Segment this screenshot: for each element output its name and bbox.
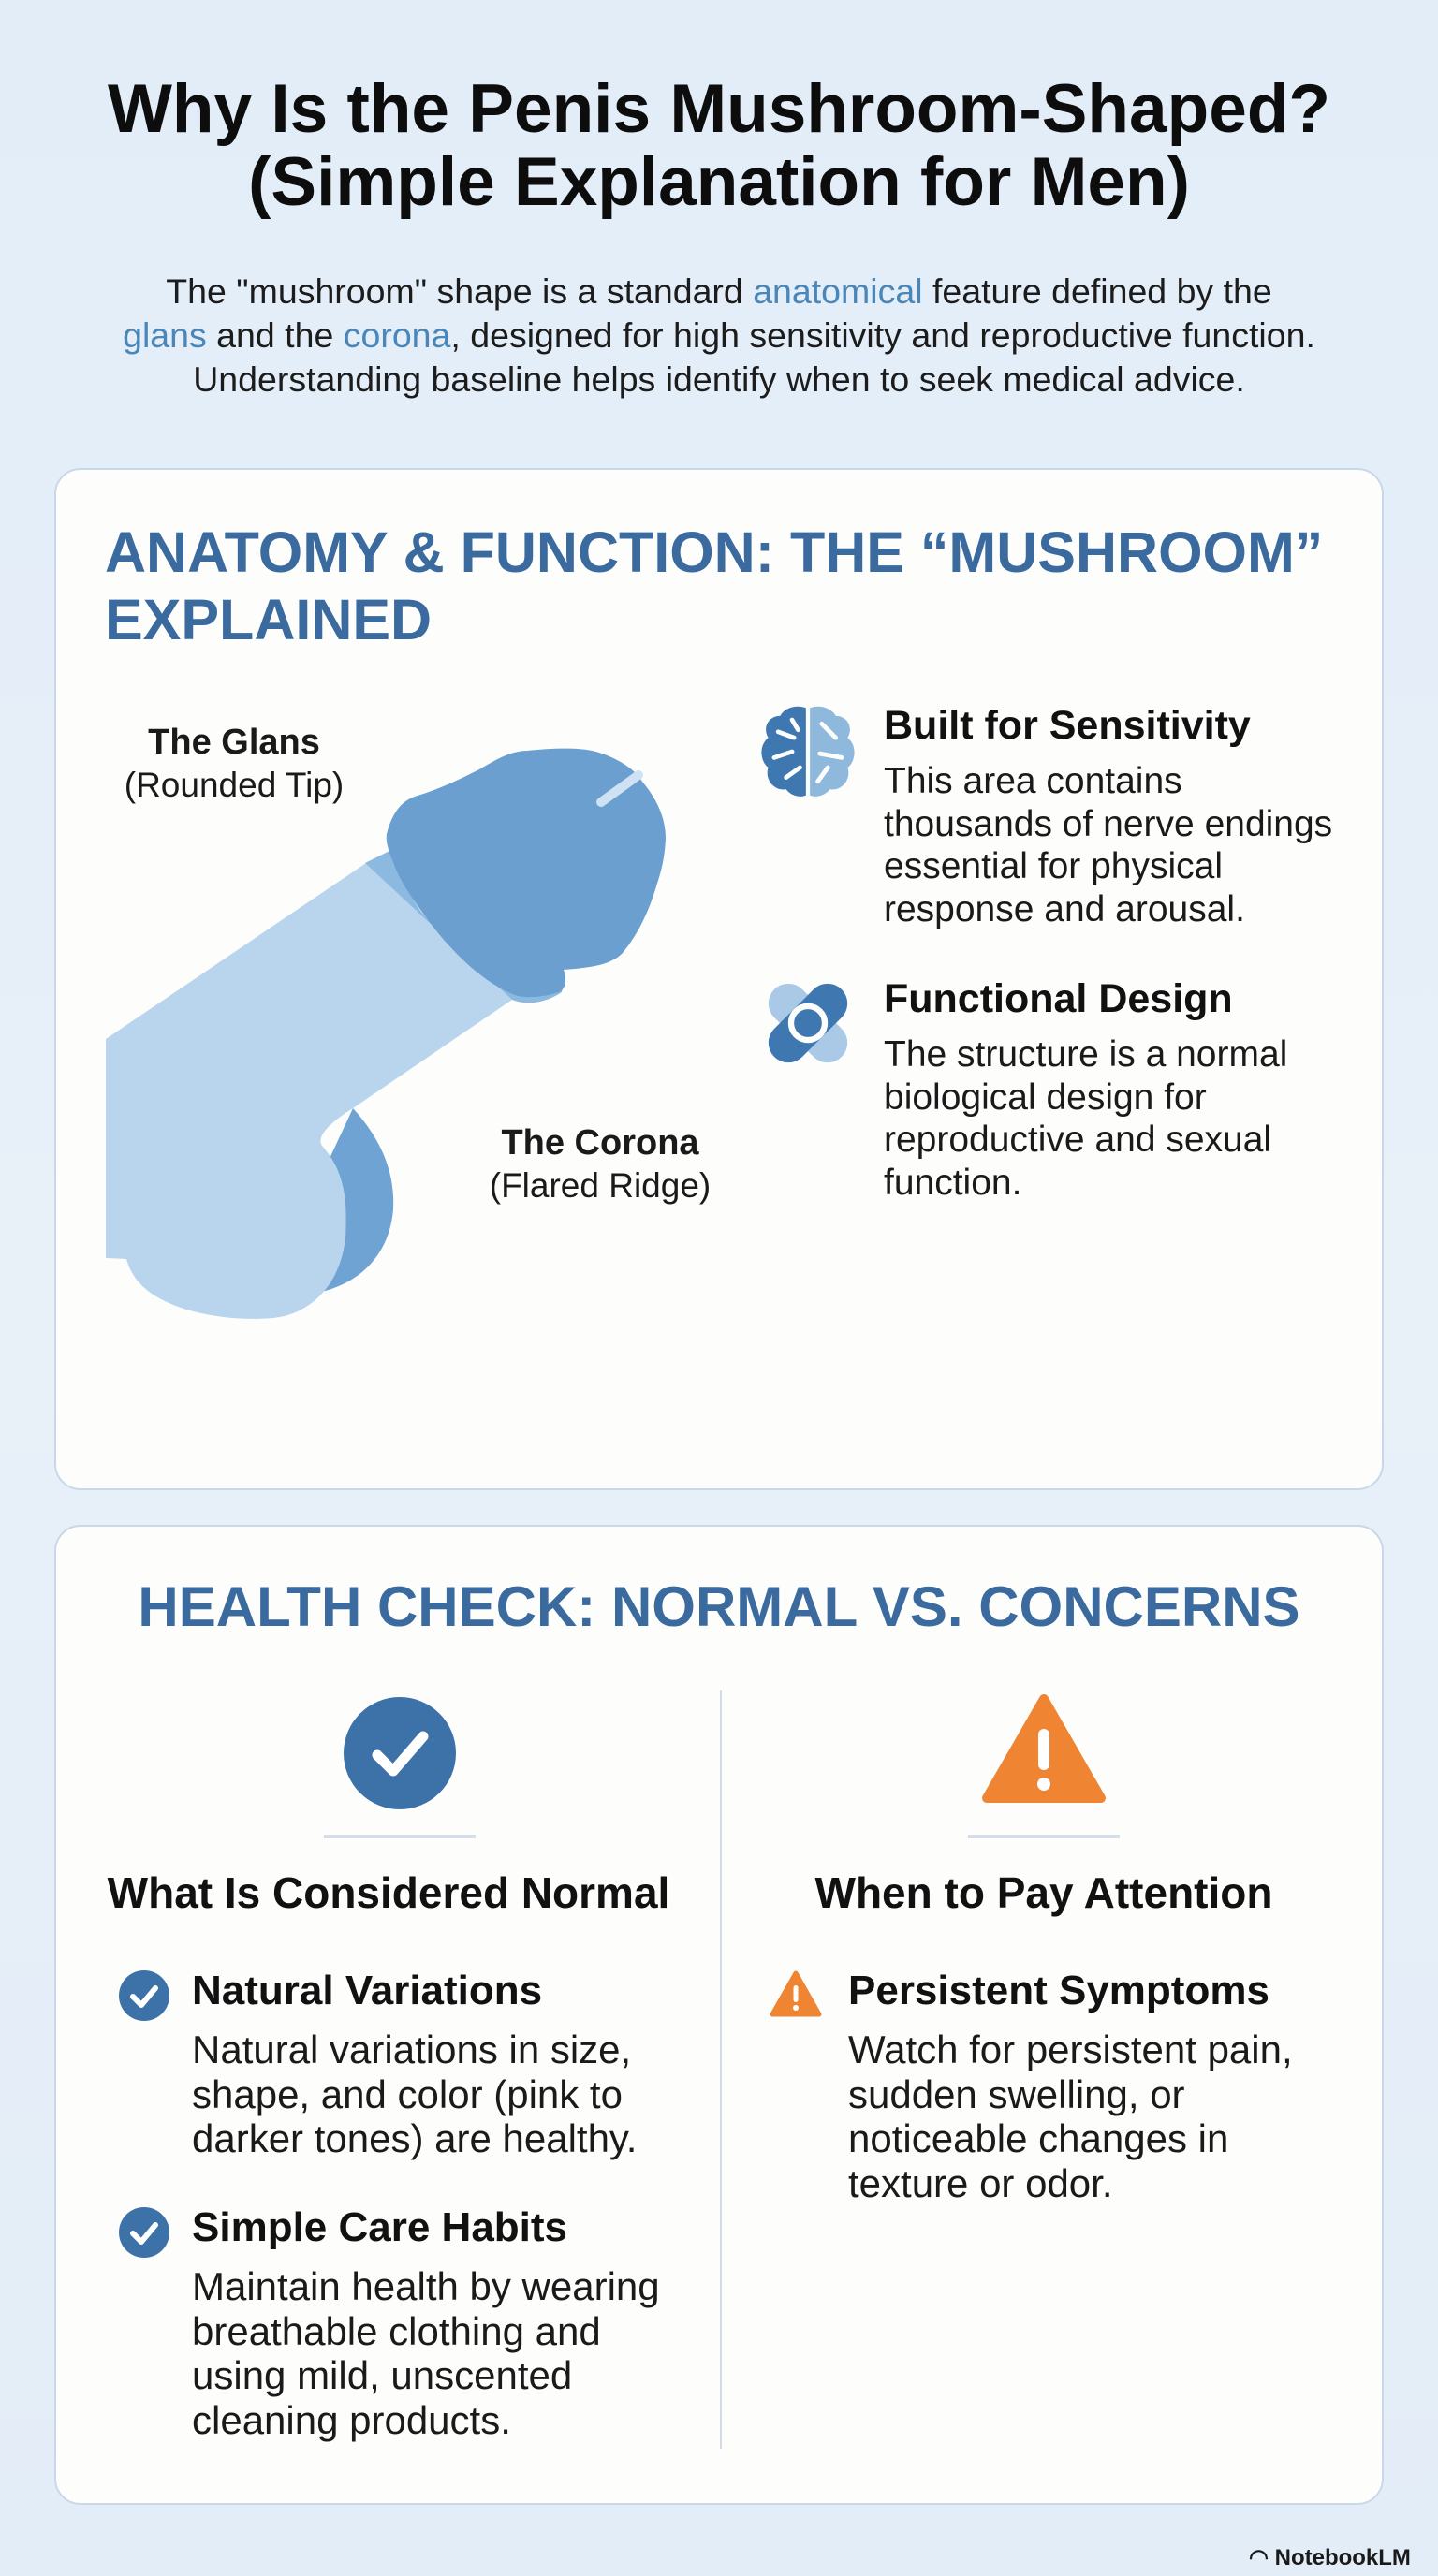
- item: natural variations: Natural Variations: [192, 1968, 542, 2013]
- label: glans: [125, 723, 344, 804]
- icon: check circle: [344, 1697, 456, 1809]
- item: persistent symptoms: noticeable changes in: [848, 2116, 1228, 2160]
- item: functional design: function.: [884, 1163, 1021, 1202]
- item: functional design: [884, 976, 1287, 1202]
- item: natural variations: Natural variations in size,: [192, 2027, 631, 2071]
- item: built for sensitivity: response and arousal.: [884, 889, 1245, 929]
- item: natural variations: [119, 1968, 637, 2160]
- icon: warning triangle: [982, 1694, 1106, 1803]
- item: simple care habits: cleaning products.: [192, 2398, 511, 2441]
- item: functional design: biological design for: [884, 1076, 1207, 1118]
- item: simple care habits: Simple Care Habits: [192, 2204, 567, 2250]
- item: built for sensitivity: [884, 703, 1332, 929]
- item: simple care habits: using mild, unscented: [192, 2353, 572, 2397]
- item: functional design: The structure is a normal: [884, 1034, 1287, 1075]
- illustration: anatomy diagram: [106, 749, 666, 1319]
- item: functional design: Functional Design: [884, 976, 1233, 1021]
- panel: anatomy & function: [54, 468, 1384, 1490]
- item: persistent symptoms: Watch for persistent pain,: [848, 2027, 1293, 2071]
- heading: anatomy: EXPLAINED: [105, 588, 432, 651]
- title: [108, 71, 1330, 220]
- heading: anatomy: [105, 520, 1323, 651]
- item: built for sensitivity: thousands of nerve endings: [884, 803, 1332, 844]
- subtitle: glans and the corona, designed for high sensitivity and reproductive function.: [123, 315, 1315, 355]
- item: built for sensitivity: Built for Sensitivity: [884, 703, 1251, 748]
- icon: small check: [119, 2207, 169, 2258]
- item: persistent symptoms: sudden swelling, or: [848, 2072, 1185, 2115]
- icon: small check: [119, 1970, 169, 2021]
- panel: health check: [54, 1525, 1384, 2505]
- item: natural variations: darker tones) are healthy.: [192, 2116, 637, 2160]
- icon: small warning: [770, 1971, 822, 2016]
- heading: health check: HEALTH CHECK: NORMAL VS. CONCERNS: [138, 1575, 1300, 1638]
- subtitle: [123, 271, 1315, 399]
- label: glans: The Glans: [148, 723, 320, 762]
- item: persistent symptoms: Persistent Symptoms: [848, 1968, 1269, 2013]
- icon: functional design: [768, 983, 848, 1063]
- subtitle: Understanding baseline helps identify when to seek medical advice.: [193, 359, 1245, 399]
- icon: brain: [761, 706, 855, 797]
- label: glans: (Rounded Tip): [125, 766, 344, 804]
- item: simple care habits: breathable clothing and: [192, 2308, 601, 2353]
- title: Why Is the Penis Mushroom-Shaped?: [108, 71, 1330, 147]
- label: corona: [490, 1123, 711, 1205]
- footer: NotebookLM logo: ◠ NotebookLM: [1249, 2545, 1411, 2570]
- item: natural variations: shape, and color (pink to: [192, 2072, 623, 2115]
- heading: anatomy: ANATOMY & FUNCTION: THE “MUSHROOM”: [105, 520, 1323, 584]
- item: functional design: reproductive and sexual: [884, 1120, 1271, 1160]
- column heading: normal: What Is Considered Normal: [108, 1868, 669, 1917]
- title: (Simple Explanation for Men): [248, 144, 1190, 220]
- item: simple care habits: [119, 2204, 660, 2441]
- item: persistent symptoms: texture or odor.: [848, 2160, 1112, 2205]
- label: corona: (Flared Ridge): [490, 1166, 711, 1205]
- label: corona: The Corona: [501, 1123, 699, 1163]
- subtitle: The "mushroom" shape is a standard anatomical feature defined by the: [166, 271, 1272, 311]
- column heading: attention: When to Pay Attention: [815, 1868, 1272, 1917]
- item: built for sensitivity: essential for physical: [884, 846, 1223, 886]
- item: simple care habits: Maintain health by wearing: [192, 2264, 660, 2308]
- item: built for sensitivity: This area contains: [884, 761, 1182, 801]
- item: persistent symptoms: [770, 1968, 1293, 2205]
